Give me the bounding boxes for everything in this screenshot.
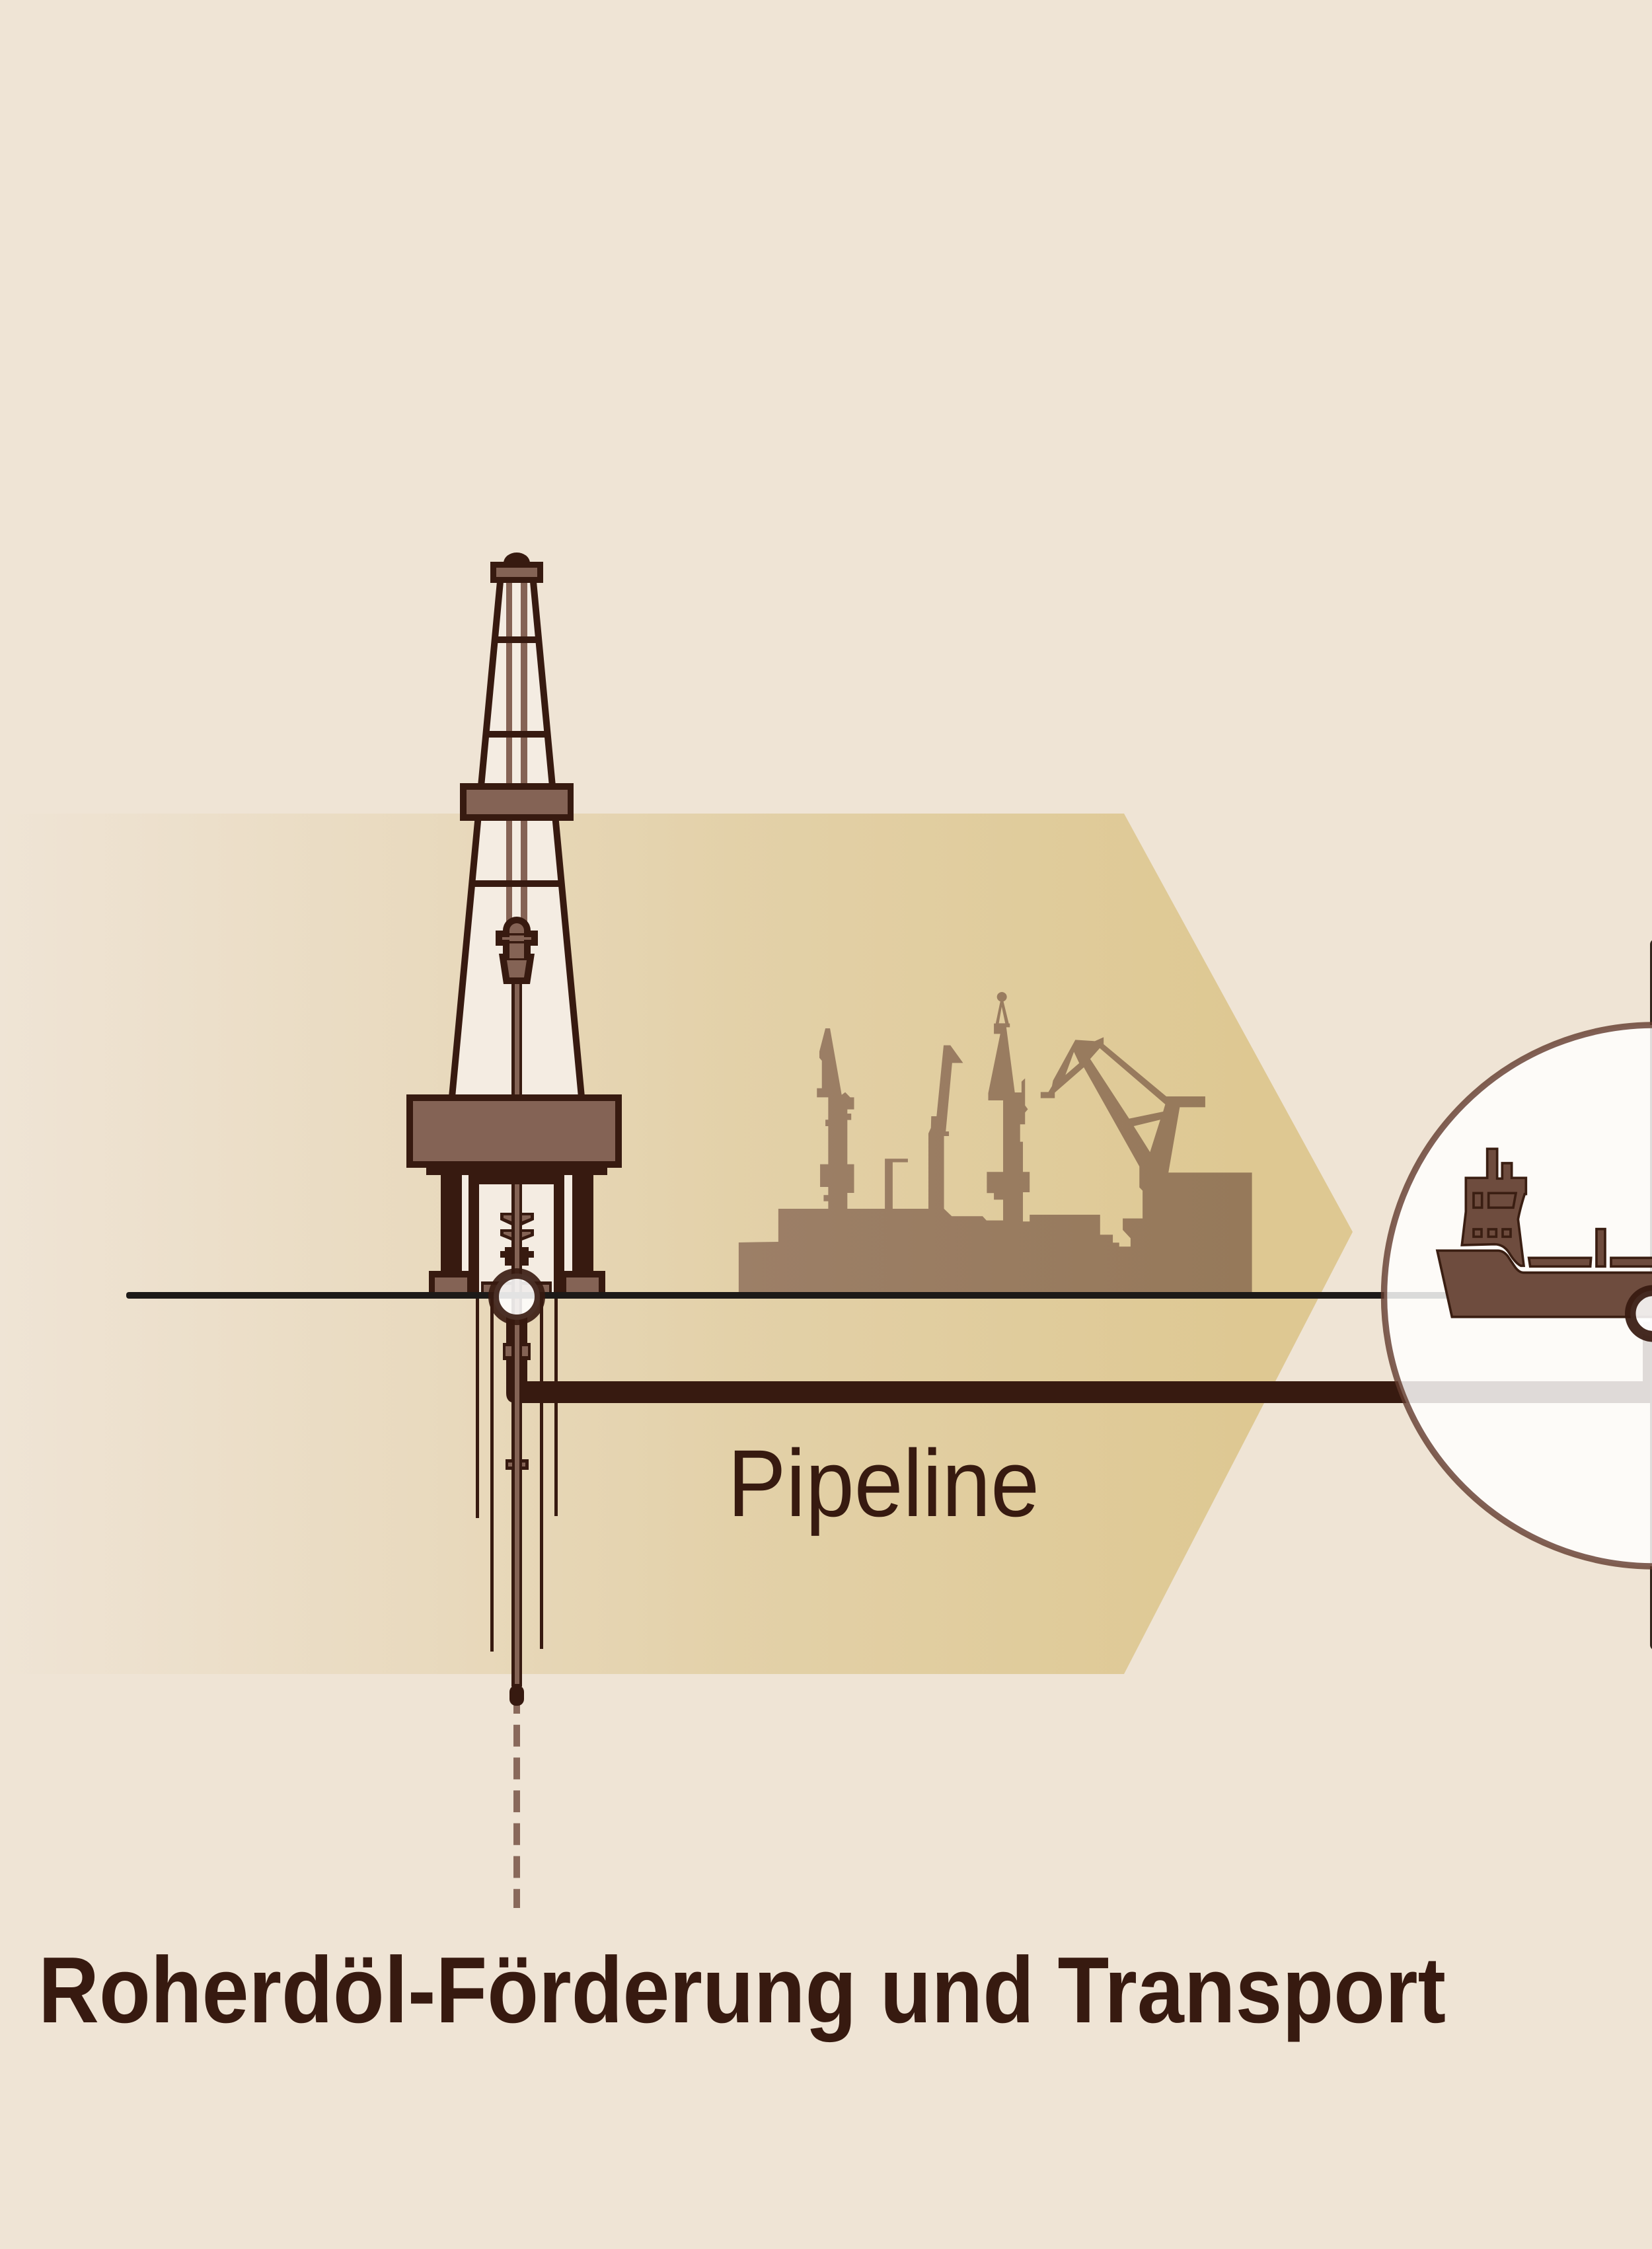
superstructure — [1462, 1149, 1526, 1266]
magnifier circle — [1384, 1025, 1652, 1566]
title: Roherdöl-Förderung und Transport — [38, 1938, 1446, 2043]
foot plates — [435, 1277, 467, 1292]
right pipeline hub — [1630, 1291, 1652, 1336]
derrick light fill — [452, 583, 582, 1094]
hook block — [496, 917, 538, 984]
bridge windows — [1474, 1193, 1482, 1207]
wellhead hub — [494, 1274, 540, 1320]
substructure — [429, 1271, 605, 1292]
cables — [506, 583, 512, 927]
deck cargo — [1529, 1258, 1591, 1266]
drilling rig — [406, 553, 622, 1706]
ground line — [126, 1292, 1652, 1299]
casing clamp lower — [506, 1459, 529, 1470]
blowout preventer — [500, 1213, 534, 1225]
derrick legs — [452, 582, 500, 1097]
wellhead clamp — [503, 1343, 531, 1360]
drill string lower — [511, 1184, 522, 1687]
mid platform — [460, 783, 574, 821]
crown dome — [504, 553, 530, 563]
crown block — [490, 562, 543, 583]
chevron arrow band — [0, 814, 1353, 1674]
hull — [1437, 1250, 1652, 1317]
dashed drill projection — [513, 1692, 520, 1908]
harbour crane silhouette — [739, 992, 1252, 1292]
icon: tanker ship — [1437, 1149, 1652, 1317]
right panel edge — [1650, 939, 1652, 1650]
cross bars — [492, 636, 541, 643]
casing lines under ground — [476, 1295, 558, 1652]
pipeline — [503, 1315, 1652, 1403]
pipeline label: Pipeline — [728, 1430, 1039, 1537]
drill rod upper — [511, 984, 522, 1096]
main platform — [406, 1094, 622, 1168]
drill bit — [509, 1685, 524, 1706]
